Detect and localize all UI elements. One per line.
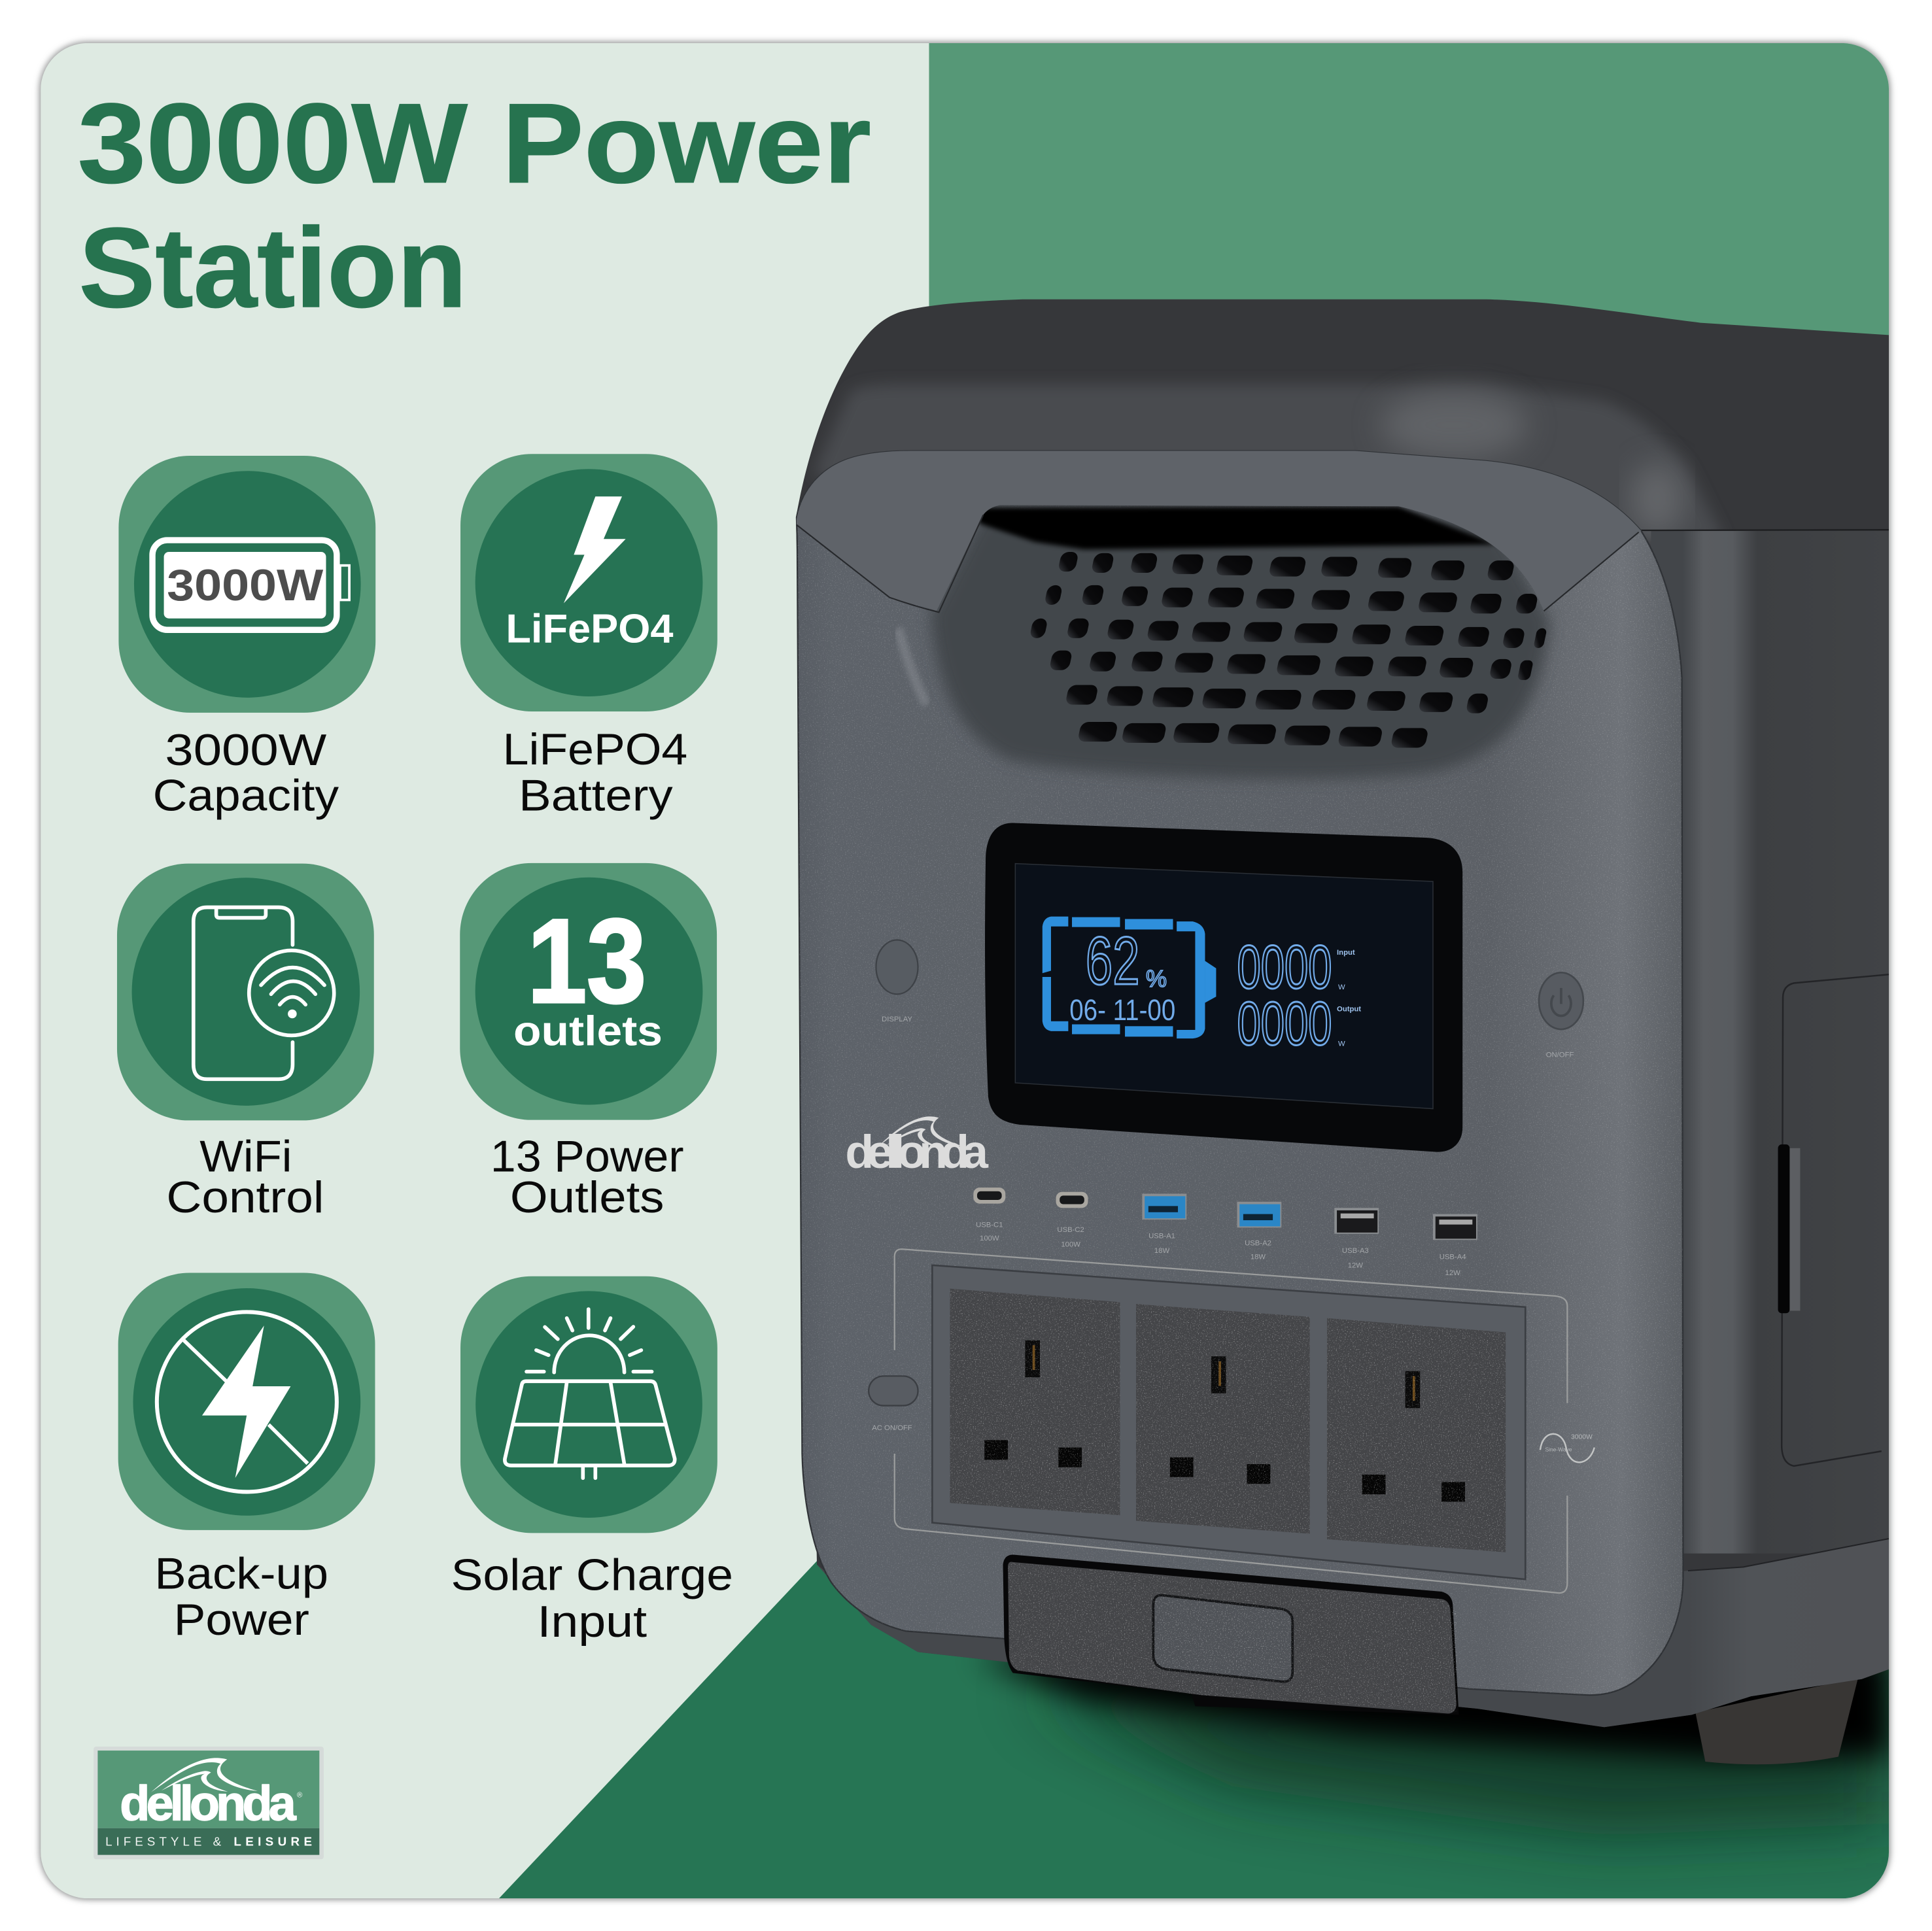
handle frame — [797, 451, 1641, 611]
input watts: 0000 — [1237, 932, 1332, 1001]
brand logo: LIFESTYLE & — [105, 1835, 222, 1849]
top-right green panel — [929, 43, 1889, 335]
label: WiFi control — [166, 1133, 324, 1222]
label: solar charge input: Solar Charge — [451, 1550, 733, 1599]
AC switch label: AC ON/OFF — [872, 1424, 912, 1432]
rubber foot — [1695, 1678, 1858, 1764]
USB-A port 2 — [1237, 1202, 1281, 1227]
USB-A port 1 — [1142, 1194, 1186, 1220]
icon: 13 outlets — [460, 863, 717, 1120]
brand logo: dellonda — [120, 1775, 297, 1830]
label: solar charge input — [451, 1550, 733, 1647]
brand logo: LEISURE — [233, 1835, 312, 1849]
speckle on dark parts — [942, 1281, 1522, 1724]
input label: Input — [1337, 949, 1355, 957]
front face — [797, 451, 1683, 1695]
label: back-up power: Back-up — [154, 1549, 328, 1598]
vent recess — [930, 507, 1550, 779]
label: 13 power outlets: Outlets — [510, 1173, 664, 1222]
floor shadow, core — [973, 1650, 1889, 1759]
label: WiFi control: Control — [166, 1173, 324, 1222]
socket plate — [932, 1265, 1525, 1579]
brand logo: ® — [297, 1792, 303, 1800]
icon: 3000W battery: 3000W — [167, 561, 323, 610]
output watts: 0000 — [1237, 989, 1332, 1058]
USB-C port 2 — [1056, 1192, 1088, 1208]
USB labels: 100W — [980, 1235, 999, 1242]
handle seam lines — [797, 515, 1639, 612]
title: Station — [79, 204, 467, 331]
label: 3000W capacity — [153, 726, 339, 821]
base band — [817, 1539, 1889, 1727]
side panel — [1651, 531, 1889, 1554]
icon: 3000W battery — [118, 456, 375, 713]
cap shoulder band — [813, 384, 1725, 542]
socket 3 — [1327, 1318, 1506, 1552]
icon: back-up power — [118, 1273, 375, 1530]
icon: LiFePO4 bolt: LiFePO4 — [506, 606, 674, 651]
battery gauge — [1043, 917, 1216, 1038]
front speckle texture — [789, 443, 1694, 1713]
bottom cover — [1003, 1555, 1459, 1715]
label: 3000W capacity: Capacity — [153, 772, 339, 821]
AC switch — [869, 1376, 918, 1406]
label: 13 power outlets: 13 Power — [491, 1133, 684, 1182]
icon: 13 outlets: outlets — [513, 1008, 663, 1055]
label: 3000W capacity: 3000W — [165, 726, 326, 775]
output label: Output — [1337, 1006, 1361, 1014]
dark green floor wedge — [499, 1561, 1889, 1899]
sine wave badge — [1540, 1433, 1595, 1462]
USB labels: USB-A1 — [1148, 1232, 1175, 1240]
floor shadow, wide — [1023, 1650, 1889, 1836]
vent holes — [1029, 552, 1547, 748]
title: 3000W Power — [78, 80, 871, 207]
USB-A port 4 — [1433, 1214, 1477, 1240]
USB labels: USB-A3 — [1342, 1247, 1369, 1255]
cover latch — [1153, 1595, 1292, 1682]
icon: WiFi phone — [117, 864, 374, 1120]
sine wave badge: 3000W — [1571, 1433, 1593, 1441]
icon: LiFePO4 bolt — [460, 454, 717, 711]
label: LiFePO4 battery — [503, 725, 687, 821]
label: 13 power outlets — [491, 1133, 684, 1222]
socket 2 — [1136, 1304, 1310, 1533]
USB-A port 3 — [1334, 1208, 1379, 1234]
icon: 13 outlets: 13 — [527, 895, 646, 1028]
label: LiFePO4 battery: LiFePO4 — [503, 725, 687, 774]
icon: solar panel — [460, 1276, 717, 1533]
display button — [876, 940, 918, 994]
label: back-up power — [154, 1549, 328, 1645]
socket 1 — [950, 1289, 1120, 1515]
label: back-up power: Power — [174, 1596, 309, 1645]
product: power station — [789, 299, 1889, 1764]
USB labels — [976, 1221, 1466, 1277]
USB labels: USB-C2 — [1057, 1226, 1084, 1234]
input unit: W — [1338, 983, 1345, 991]
USB labels: 12W — [1445, 1269, 1460, 1277]
display label: DISPLAY — [882, 1016, 912, 1023]
USB labels: 18W — [1251, 1253, 1266, 1261]
on/off label: ON/OFF — [1546, 1051, 1574, 1059]
label: solar charge input: Input — [537, 1598, 647, 1647]
title — [78, 80, 871, 331]
battery percentage: 62 — [1086, 923, 1140, 999]
USB labels: 12W — [1348, 1262, 1363, 1270]
back body — [796, 299, 1889, 1727]
device logo: dellonda — [845, 1126, 989, 1178]
USB labels: 18W — [1154, 1247, 1169, 1255]
screen bezel — [985, 823, 1462, 1152]
cap highlight — [1380, 390, 1528, 460]
handle shadow — [973, 506, 1497, 549]
percent sign: % — [1146, 966, 1167, 992]
brand logo — [94, 1747, 324, 1859]
side door — [1782, 974, 1889, 1466]
LCD panel — [1015, 864, 1433, 1109]
side seam — [1641, 529, 1889, 531]
corner highlight — [1630, 462, 1684, 536]
label: WiFi control: WiFi — [199, 1133, 292, 1182]
output unit: W — [1338, 1040, 1345, 1048]
sine wave badge: Sine-Wave — [1545, 1446, 1572, 1452]
base seam — [1688, 1539, 1889, 1571]
time readout: 06- 11-00 — [1069, 993, 1175, 1027]
label: LiFePO4 battery: Battery — [519, 772, 673, 821]
USB labels: 100W — [1061, 1241, 1080, 1249]
side latch — [1778, 1144, 1800, 1313]
power button — [1539, 972, 1583, 1029]
USB-C port 1 — [973, 1188, 1005, 1204]
vent highlight — [898, 628, 927, 705]
USB labels: USB-A4 — [1440, 1253, 1466, 1261]
USB labels: USB-A2 — [1245, 1240, 1271, 1248]
USB labels: USB-C1 — [976, 1221, 1003, 1229]
AC panel outline — [895, 1249, 1567, 1593]
